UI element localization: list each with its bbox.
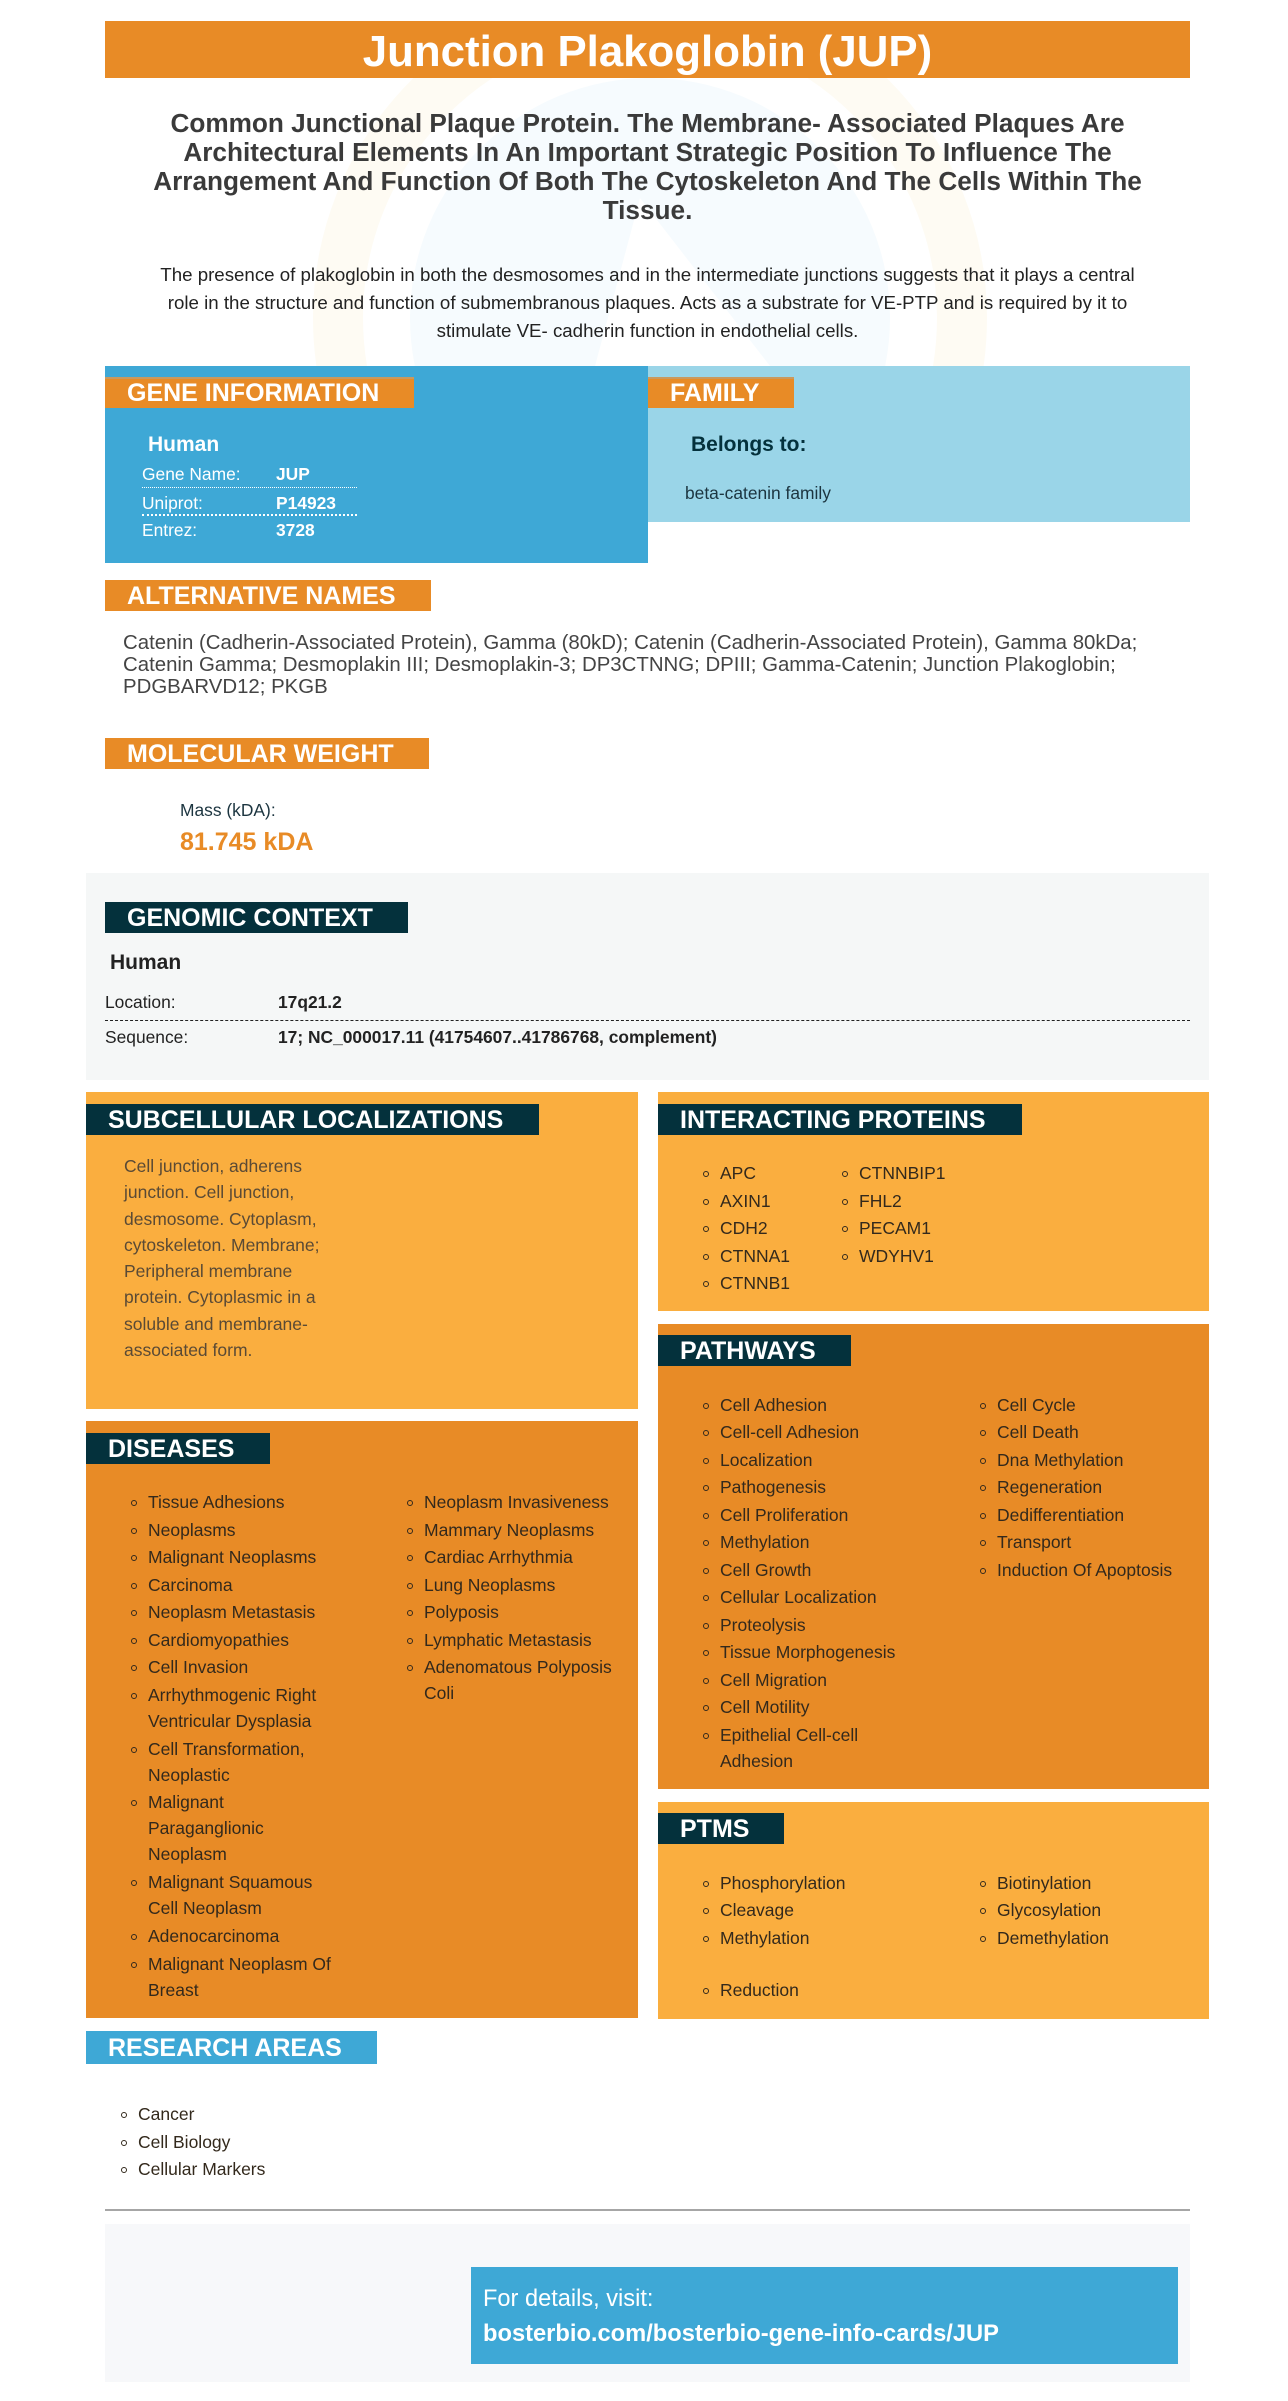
pathway list: Dna Methylation [997,1450,1123,1470]
mass value: 81.745 kDA [180,828,313,856]
panel: subcellular localizations [86,1092,638,1409]
disease list: Adenocarcinoma [148,1926,279,1946]
localization text: desmosome. Cytoplasm, [124,1209,317,1229]
pathway list: Tissue Morphogenesis [720,1642,895,1662]
ptm list: Glycosylation [997,1900,1101,1920]
localization text: Peripheral membrane [124,1261,292,1281]
ptm list: Reduction [720,1980,799,2000]
pathway list: Methylation [720,1532,810,1552]
research areas list: Cell Biology [138,2132,230,2152]
pathway list: Proteolysis [720,1615,806,1635]
pathway list: Dedifferentiation [997,1505,1124,1525]
subtitle: Arrangement And Function Of Both The Cytoskeleton And The Cells Within The [153,166,1142,196]
pathway list: Cell Migration [720,1670,827,1690]
localization text [124,1156,320,1360]
disease list [131,1492,612,2000]
gene name row [142,462,357,488]
uniprot row: Uniprot: [142,493,203,513]
pathway list: Adhesion [720,1751,793,1771]
uniprot row [142,491,357,516]
heading: molecular weight: MOLECULAR WEIGHT [127,740,394,768]
heading: pathways [658,1335,851,1366]
heading: ptms: PTMS [680,1815,749,1843]
panel: diseases [86,1421,638,2018]
ptm list: Cleavage [720,1900,794,1920]
ptm list: Methylation [720,1928,810,1948]
ptm list: Phosphorylation [720,1873,846,1893]
disease list: Malignant Neoplasms [148,1547,316,1567]
disease list: Malignant Neoplasm Of [148,1954,331,1974]
protein list [703,1163,946,1293]
protein list: CTNNBIP1 [859,1163,946,1183]
disease list: Cell Invasion [148,1657,248,1677]
localization text: associated form. [124,1340,252,1360]
heading: genomic context: GENOMIC CONTEXT [127,904,373,932]
disease list: Coli [424,1683,454,1703]
location row: 17q21.2 [278,992,342,1012]
protein list: CTNNB1 [720,1273,790,1293]
gene name row: JUP [276,464,310,484]
heading: family [648,377,794,408]
callout: details link [471,2267,1178,2364]
entrez row: 3728 [276,520,315,540]
pathway list: Pathogenesis [720,1477,826,1497]
pathway list: Cell Adhesion [720,1395,827,1415]
pathway list: Cell-cell Adhesion [720,1422,859,1442]
disease list: Neoplasm [148,1844,227,1864]
sequence row: Sequence: [105,1027,188,1047]
background watermark logo [313,78,987,366]
family value: beta-catenin family [685,483,831,503]
disease list: Malignant Squamous [148,1872,312,1892]
alternative names text: Catenin (Cadherin-Associated Protein), Gamma (80kD); Catenin (Cadherin-Associated Protein), Gamma 80kDa; [123,632,1137,654]
pathway list: Regeneration [997,1477,1102,1497]
pathway list: Cell Cycle [997,1395,1076,1415]
localization text: soluble and membrane- [124,1314,308,1334]
protein list: FHL2 [859,1191,902,1211]
heading: family: FAMILY [670,379,759,407]
url: bosterbio.com/bosterbio-gene-info-cards/JUP [483,2321,999,2347]
disease list: Cell Neoplasm [148,1898,262,1918]
location row [105,990,1190,1021]
heading: research areas [86,2031,377,2064]
protein list: CTNNA1 [720,1246,790,1266]
disease list: Tissue Adhesions [148,1492,285,1512]
subtitle: Common Junctional Plaque Protein. The Membrane- Associated Plaques Are [170,108,1125,138]
pathway list: Cell Growth [720,1560,811,1580]
panel: pathways [658,1324,1209,1789]
disease list: Lymphatic Metastasis [424,1630,592,1650]
disease list: Cell Transformation, [148,1739,305,1759]
disease list: Carcinoma [148,1575,233,1595]
subtitle: Architectural Elements In An Important Strategic Position To Influence The [183,137,1112,167]
subtitle [153,108,1142,225]
pathway list [703,1395,1172,1771]
belongs to label: Belongs to: [691,433,806,456]
entrez row: Entrez: [142,520,197,540]
disease list: Neoplastic [148,1765,230,1785]
protein list: WDYHV1 [859,1246,934,1266]
ptm list: Demethylation [997,1928,1109,1948]
alternative names text: PDGBARVD12; PKGB [123,676,328,698]
localization text: junction. Cell junction, [124,1182,294,1202]
heading: diseases: DISEASES [108,1435,234,1463]
heading: subcellular localizations: SUBCELLULAR LOCALIZATIONS [108,1106,503,1134]
heading: interacting proteins: INTERACTING PROTEINS [680,1106,986,1134]
description paragraph [160,264,1135,341]
research areas list: Cellular Markers [138,2159,265,2179]
species label: Human [148,433,219,456]
panel: ptms [658,1802,1209,2019]
uniprot row: P14923 [276,493,336,513]
visit label: For details, visit: [483,2286,653,2312]
disease list: Breast [148,1980,199,2000]
heading: ptms [658,1813,784,1844]
disease list: Malignant [148,1792,224,1812]
disease list: Cardiac Arrhythmia [424,1547,573,1567]
panel: gene information [105,366,648,563]
disease list: Polyposis [424,1602,499,1622]
description paragraph: role in the structure and function of submembranous plaques. Acts as a substrate for VE-PTP and is required by it to [168,292,1127,313]
ptm list: Biotinylation [997,1873,1091,1893]
heading: pathways: PATHWAYS [680,1337,816,1365]
localization text: Cell junction, adherens [124,1156,302,1176]
pathway list: Cell Motility [720,1697,809,1717]
mass label: Mass (kDA): [180,800,276,820]
disease list: Neoplasm Invasiveness [424,1492,609,1512]
protein list: CDH2 [720,1218,768,1238]
disease list: Arrhythmogenic Right [148,1685,316,1705]
pathway list: Cellular Localization [720,1587,877,1607]
species label: Human [110,951,181,974]
pathway list: Cell Death [997,1422,1079,1442]
disease list: Neoplasm Metastasis [148,1602,315,1622]
disease list: Lung Neoplasms [424,1575,555,1595]
protein list: APC [720,1163,756,1183]
pathway list: Localization [720,1450,812,1470]
localization text: protein. Cytoplasmic in a [124,1287,316,1307]
protein list: AXIN1 [720,1191,771,1211]
disease list: Paraganglionic [148,1818,264,1838]
ptm list [703,1873,1109,2000]
pathway list: Induction Of Apoptosis [997,1560,1172,1580]
entrez row [142,520,315,540]
gene name row: Gene Name: [142,464,241,484]
disease list: Adenomatous Polyposis [424,1657,612,1677]
panel: family [648,366,1190,522]
disease list: Cardiomyopathies [148,1630,289,1650]
localization text: cytoskeleton. Membrane; [124,1235,320,1255]
disease list: Ventricular Dysplasia [148,1711,311,1731]
location row: Location: [105,992,176,1012]
panel: interacting proteins [658,1092,1209,1311]
research areas list [121,2104,265,2179]
disease list: Neoplasms [148,1520,236,1540]
heading: diseases [86,1433,270,1464]
pathway list: Transport [997,1532,1071,1552]
alternative names text: Catenin Gamma; Desmoplakin III; Desmoplakin-3; DP3CTNNG; DPIII; Gamma-Catenin; Junction Plakoglobin; [123,654,1116,676]
research areas list: Cancer [138,2104,194,2124]
title banner [105,21,1190,78]
heading: alternative names: ALTERNATIVE NAMES [127,582,396,610]
pathway list: Cell Proliferation [720,1505,848,1525]
disease list: Mammary Neoplasms [424,1520,594,1540]
title banner: Junction Plakoglobin (JUP) [363,27,932,76]
subtitle: Tissue. [603,195,692,225]
sequence row: 17; NC_000017.11 (41754607..41786768, complement) [278,1027,717,1047]
description paragraph: stimulate VE- cadherin function in endothelial cells. [437,320,858,341]
panel: footer [105,2224,1190,2382]
panel: genomic context [86,873,1209,1080]
heading: gene information: GENE INFORMATION [127,379,379,407]
description paragraph: The presence of plakoglobin in both the desmosomes and in the intermediate junctions suggests that it plays a central [160,264,1135,285]
alternative names text [123,632,1137,698]
protein list: PECAM1 [859,1218,931,1238]
pathway list: Epithelial Cell-cell [720,1725,858,1745]
heading: research areas: RESEARCH AREAS [108,2034,342,2062]
